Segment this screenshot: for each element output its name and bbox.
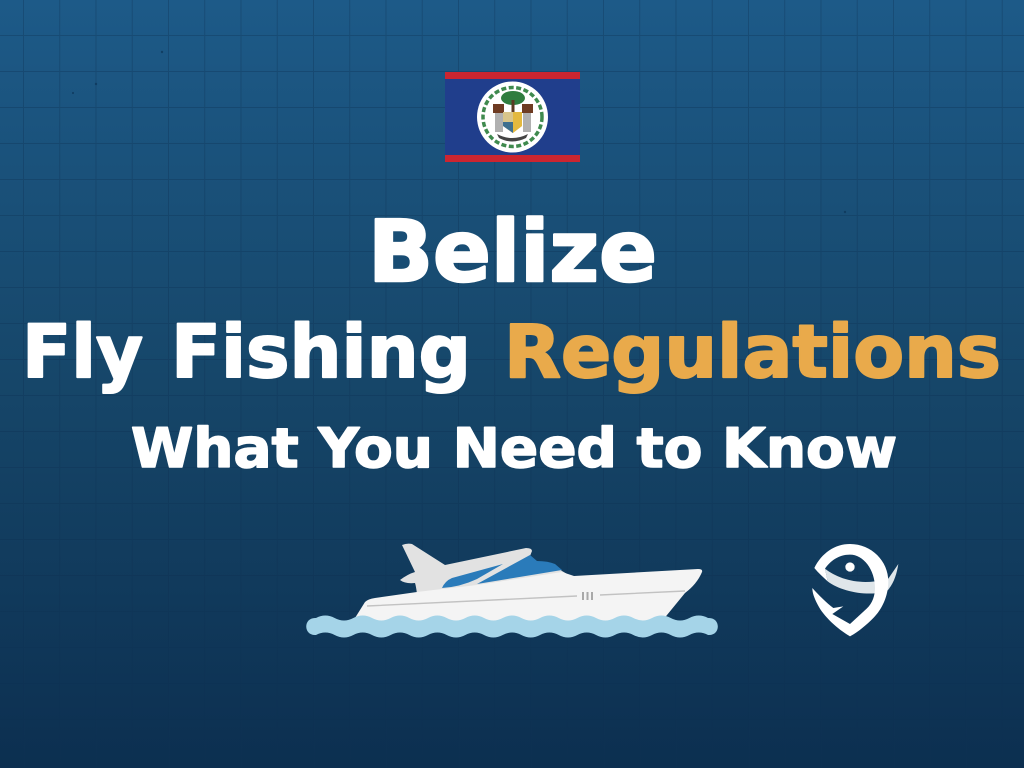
subheading: What You Need to Know: What You Need to Know <box>131 417 897 480</box>
heading: Fly Fishing Regulations: Regulations <box>504 310 1001 395</box>
heading: Fly Fishing Regulations: Fly <box>22 310 143 395</box>
heading: Fly Fishing Regulations <box>22 310 1001 395</box>
heading: Fly Fishing Regulations: Fishing <box>171 310 471 395</box>
icon: fish hook logo <box>812 544 898 636</box>
icon: flag of Belize <box>445 72 580 162</box>
icon: boat on water <box>306 544 718 638</box>
title: Belize: Belize <box>368 203 657 302</box>
